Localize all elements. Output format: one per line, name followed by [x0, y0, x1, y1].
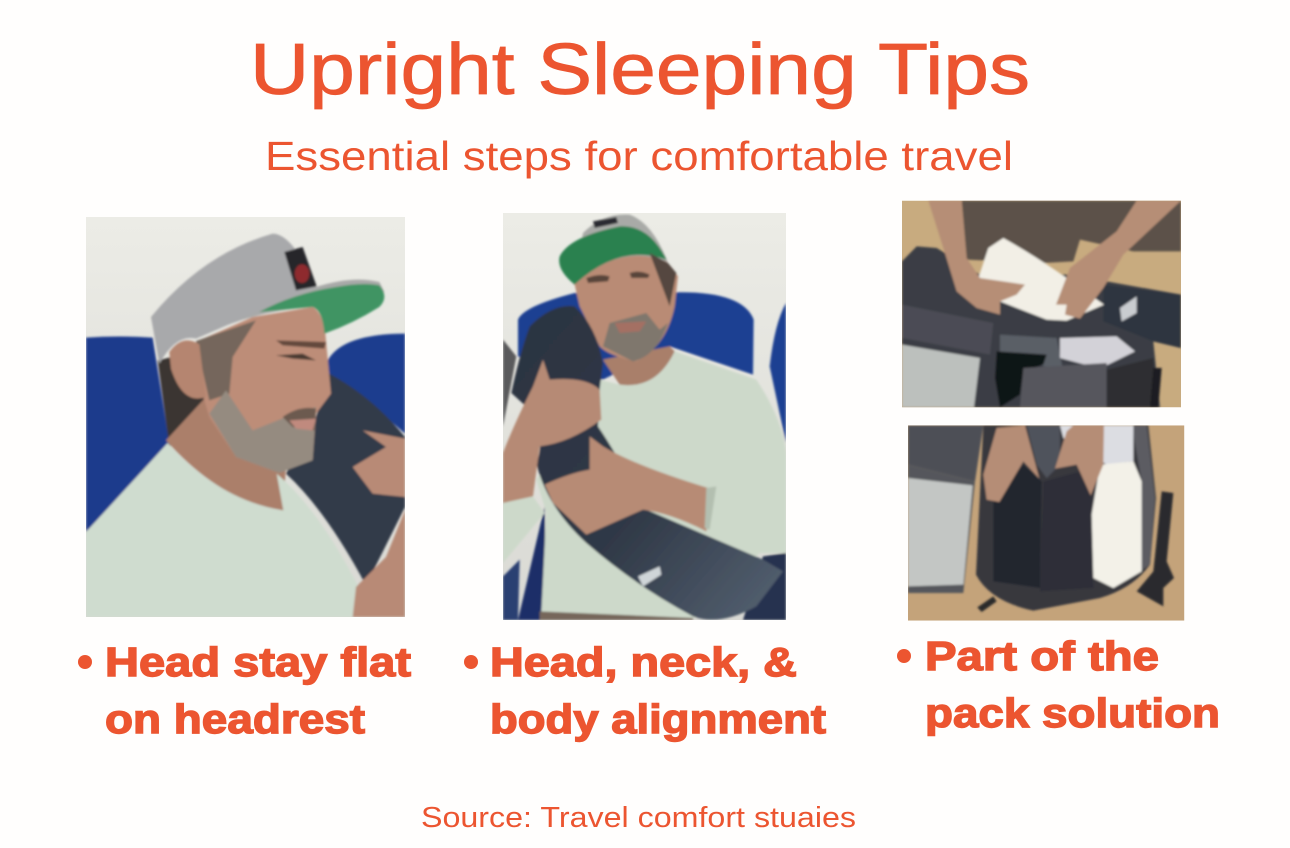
tip 3: pack solution: [897, 633, 1220, 736]
tip 1: head stay flat: [78, 639, 411, 742]
photo: pillow packed inside the backpack: [908, 425, 1184, 621]
tip 2: alignment: [464, 639, 826, 742]
photo: hugging pillow for head, neck and body alignment: [503, 213, 786, 620]
tip 3: pack solution: Part of the: [925, 633, 1159, 679]
tip 2: alignment: body alignment: [490, 696, 826, 742]
source note: Source: Travel comfort stuaies: [421, 802, 856, 834]
tip 1: head stay flat: on headrest: [105, 696, 365, 742]
tip 1: head stay flat: Head stay flat: [105, 639, 411, 685]
title: Upright Sleeping Tips: [250, 30, 1030, 110]
tip 2: alignment: Head, neck, &: [490, 639, 797, 685]
photo: rolling the pillow over a backpack: [902, 201, 1181, 407]
tip 3: pack solution: pack solution: [925, 690, 1220, 736]
photo: head resting flat on headrest with pillow: [86, 217, 405, 617]
subtitle: Essential steps for comfortable travel: [265, 133, 1013, 179]
